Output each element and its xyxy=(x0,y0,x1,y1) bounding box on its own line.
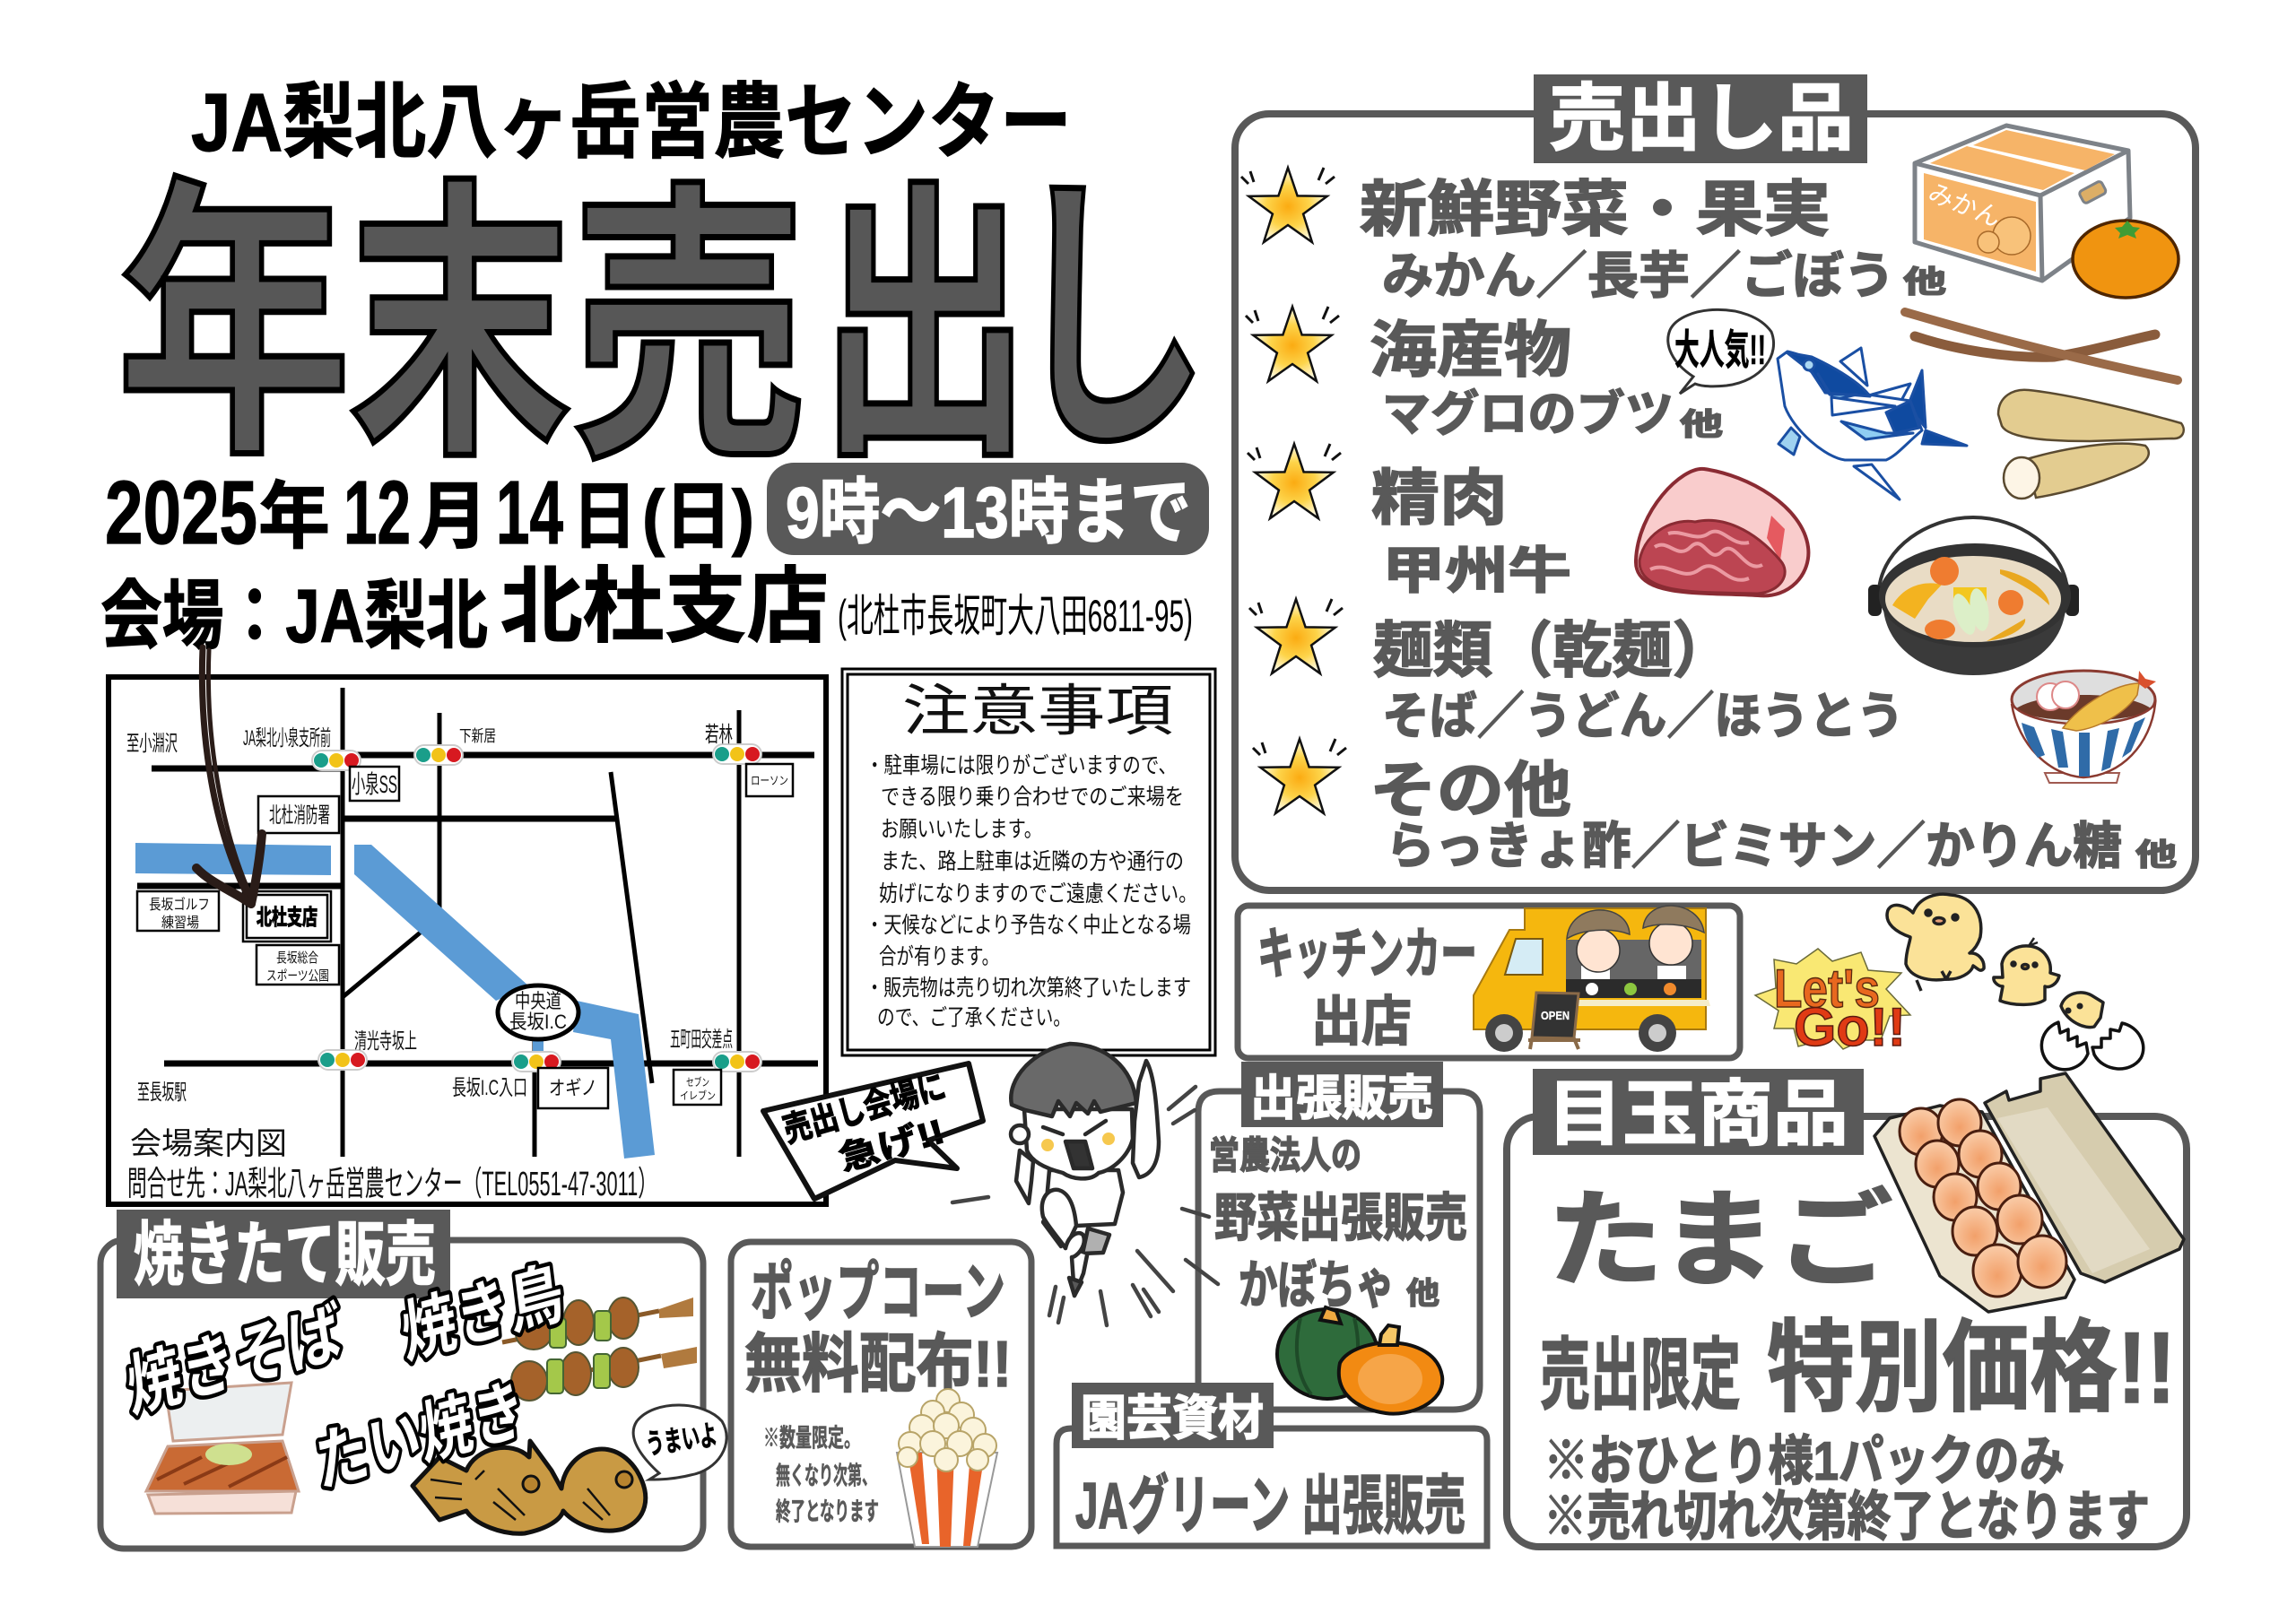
grilled food labels: たい焼き xyxy=(312,1371,529,1501)
notices body: 妨げになりますのでご遠慮ください。 xyxy=(879,881,1197,907)
map landmarks: 北杜消防署 xyxy=(269,803,330,828)
map landmarks: 長坂ゴルフ xyxy=(149,896,210,913)
callout: tasty: うまいよ xyxy=(644,1419,719,1461)
arrow: venue to store xyxy=(196,647,262,904)
map landmarks: 小泉SS xyxy=(352,770,397,798)
panel: free popcorn: 終了となります xyxy=(776,1497,879,1525)
notices body: また、路上駐車は近隣の方や通行の xyxy=(881,849,1184,874)
grilled food labels: 焼き鳥 xyxy=(398,1254,568,1372)
map labels: 至長坂駅 xyxy=(137,1081,187,1105)
map traffic lights xyxy=(312,744,761,1072)
panel: fresh-grilled foods xyxy=(100,1210,703,1549)
map labels: JA梨北小泉支所前 xyxy=(243,726,331,751)
callout: tasty xyxy=(633,1405,726,1480)
notices body: ・販売物は売り切れ次第終了いたします xyxy=(865,976,1191,1001)
icon: yakisoba tray xyxy=(146,1383,299,1514)
panel: venue map: 五町田交差点 xyxy=(670,1028,733,1052)
icon: yakitori skewers xyxy=(493,1298,697,1401)
map landmarks: スポーツ公園 xyxy=(266,968,329,984)
heading: 園芸資材 xyxy=(1081,1392,1264,1445)
sale items heading: 売出し品 xyxy=(1549,78,1854,160)
item: seafood: マグロのブツ xyxy=(1382,387,1674,441)
event date xyxy=(105,463,754,563)
map labels: 長坂I.C入口 xyxy=(452,1076,527,1100)
speed lines xyxy=(952,1087,1218,1325)
main title: し xyxy=(1010,155,1209,484)
notices body: ので、ご了承ください。 xyxy=(877,1005,1071,1030)
item: fresh produce: 新鮮野菜・果実 xyxy=(1360,176,1831,244)
panel: kitchen car: 出店 xyxy=(1311,992,1412,1052)
item: other: 他 xyxy=(2135,838,2177,872)
map landmarks: イレブン xyxy=(680,1089,716,1102)
item: fresh produce: みかん／長芋／ごぼう xyxy=(1382,247,1895,304)
panel: featured item: たまご xyxy=(1547,1182,1893,1300)
main title: 末 xyxy=(348,162,572,491)
icon: mikan box: みかん xyxy=(1925,178,2005,232)
map landmarks: セブン xyxy=(686,1075,709,1089)
item: other: らっきょ酢／ビミサン／かりん糖 xyxy=(1386,818,2122,874)
notices body: お願いいたします。 xyxy=(881,817,1042,842)
icon: let's go burst xyxy=(1755,949,1910,1057)
icon: wagyu beef xyxy=(1636,469,1808,595)
heading: 出張販売 xyxy=(1250,1072,1433,1125)
panel: free popcorn: 無くなり次第、 xyxy=(776,1462,876,1489)
item: seafood: 海産物 xyxy=(1370,317,1571,385)
panel: on-site vegetable sale: 他 xyxy=(1406,1277,1439,1311)
item: other xyxy=(1370,757,2177,874)
contact line: 問合せ先：JA梨北八ヶ岳営農センター（TEL0551-47-3011） xyxy=(127,1166,657,1203)
icon: food truck: OPEN xyxy=(1541,1009,1570,1022)
item: fresh produce xyxy=(1360,176,1946,304)
character: running person xyxy=(1011,1044,1159,1296)
map labels: 下新居 xyxy=(459,727,496,745)
panel: free popcorn xyxy=(731,1242,1031,1547)
callout: hurry to the sale: 売出し会場に xyxy=(779,1068,950,1150)
grilled food labels xyxy=(124,1254,568,1501)
event date: 2025 xyxy=(105,463,257,563)
panel: featured item: 特別価格!! xyxy=(1767,1312,2176,1424)
icon: yams xyxy=(1998,390,2184,499)
icon: food truck xyxy=(1474,906,1710,1052)
panel: on-site vegetable sale: かぼちゃ xyxy=(1239,1256,1395,1315)
stars xyxy=(1241,168,1346,813)
event date: 14 xyxy=(496,463,563,563)
venue: 北杜支店 xyxy=(500,561,829,653)
venue: 会場：JA梨北 xyxy=(100,574,488,658)
callout: very popular xyxy=(1668,309,1774,394)
map labels: 清光寺坂上 xyxy=(354,1029,417,1054)
event date: (日) xyxy=(642,476,754,558)
heading: 目玉商品 xyxy=(1547,1074,1848,1154)
icon: noodle bowl xyxy=(2012,671,2156,783)
main title: 売 xyxy=(571,165,806,494)
item: seafood: 他 xyxy=(1680,408,1723,442)
panel: free popcorn: ポップコーン xyxy=(751,1257,1005,1329)
venue xyxy=(100,561,1193,658)
panel: featured item: ※売れ切れ次第終了となります xyxy=(1544,1487,2150,1547)
map interchange xyxy=(498,985,578,1039)
panel: on-site vegetable sale: 野菜出張販売 xyxy=(1214,1189,1467,1247)
item: noodles: そば／うどん／ほうとう xyxy=(1382,688,1904,744)
panel: kitchen car xyxy=(1238,906,1740,1058)
panel: notices xyxy=(842,669,1215,1055)
event date: 月 xyxy=(418,476,488,558)
item: meat: 精肉 xyxy=(1371,464,1508,533)
map labels xyxy=(126,723,733,1105)
panel: garden supplies xyxy=(1057,1383,1487,1546)
main title: 年 xyxy=(117,161,352,490)
notices heading: 注意事項 xyxy=(902,681,1173,742)
map interchange: 中央道 xyxy=(515,990,561,1012)
icon: broken egg shell xyxy=(2041,1022,2144,1070)
icon: let's go burst: Let's xyxy=(1774,959,1880,1019)
panel: featured item: ※おひとり様1パックのみ xyxy=(1544,1431,2065,1491)
map interchange: 長坂I.C xyxy=(509,1011,567,1033)
event date: 年 xyxy=(258,476,330,558)
map roads xyxy=(137,688,818,1157)
notices body: できる限り乗り合わせでのご来場を xyxy=(881,785,1184,810)
panel: sale items xyxy=(1235,74,2196,890)
map expressway xyxy=(135,843,655,1159)
panel: on-site vegetable sale: 営農法人の xyxy=(1209,1134,1361,1176)
item: meat xyxy=(1371,464,1571,599)
map caption: 会場案内図 xyxy=(130,1127,287,1161)
item: meat: 甲州牛 xyxy=(1382,542,1571,599)
subtitle: organizer: JA梨北八ヶ岳営農センター xyxy=(191,77,1072,169)
item: fresh produce: 他 xyxy=(1903,265,1946,299)
item: seafood xyxy=(1370,317,1723,442)
heading: 焼きたて販売 xyxy=(134,1215,436,1294)
callout: hurry to the sale xyxy=(763,1063,983,1199)
panel: featured item: 売出限定 xyxy=(1540,1331,1741,1419)
panel: free popcorn: ※数量限定。 xyxy=(763,1424,860,1452)
icon: mikan box xyxy=(1915,126,2130,281)
map labels: 若林 xyxy=(705,723,733,747)
icon: taiyaki xyxy=(413,1441,646,1533)
venue: (北杜市長坂町大八田6811-95) xyxy=(838,591,1193,641)
main title xyxy=(117,155,1209,494)
icon: burdock xyxy=(1905,312,2178,380)
event date: 日 xyxy=(572,476,637,558)
item: other: その他 xyxy=(1370,757,1571,825)
map landmarks: 長坂総合 xyxy=(276,950,318,966)
item: noodles xyxy=(1373,617,1904,744)
icon: let's go burst: Go!! xyxy=(1794,997,1906,1057)
panel: free popcorn: 無料配布!! xyxy=(744,1329,1012,1401)
map landmarks: 練習場 xyxy=(161,915,199,931)
grilled food labels: 焼きそば xyxy=(124,1295,346,1426)
panel: garden supplies: JAグリーン 出張販売 xyxy=(1075,1471,1465,1542)
icon: mandarin orange xyxy=(2073,221,2179,298)
event date: 12 xyxy=(344,463,411,563)
map landmarks: オギノ xyxy=(549,1077,597,1099)
callout: hurry to the sale: 急げ!! xyxy=(835,1113,949,1179)
time badge: 9時～13時まで xyxy=(786,473,1191,552)
heading xyxy=(117,1210,450,1298)
panel: kitchen car: キッチンカー xyxy=(1257,924,1477,985)
item: noodles: 麺類（乾麺） xyxy=(1373,617,1732,685)
notices body: ・駐車場には限りがございますので、 xyxy=(865,752,1177,778)
map landmarks xyxy=(137,764,793,1108)
notices body: ・天候などにより予告なく中止となる場 xyxy=(865,913,1191,938)
panel: on-site vegetable sale xyxy=(1198,1062,1480,1410)
icon: pumpkins xyxy=(1277,1307,1442,1414)
notices body xyxy=(865,752,1197,1030)
icon: tuna xyxy=(1778,348,1967,499)
icon: chicks xyxy=(1887,894,2103,1028)
main title: 出 xyxy=(818,162,1031,491)
icon: hoto pot xyxy=(1868,517,2079,675)
icon: popcorn xyxy=(897,1389,997,1547)
callout: very popular: 大人気!! xyxy=(1674,326,1766,373)
map landmarks: ローソン xyxy=(751,774,788,787)
panel: featured item xyxy=(1507,1069,2187,1547)
icon: egg carton xyxy=(1874,1073,2184,1312)
panel: venue map xyxy=(109,677,826,1204)
notices body: 合が有ります。 xyxy=(879,944,999,969)
map landmarks: 北杜支店 xyxy=(257,906,317,930)
map labels: 至小淵沢 xyxy=(126,732,178,756)
